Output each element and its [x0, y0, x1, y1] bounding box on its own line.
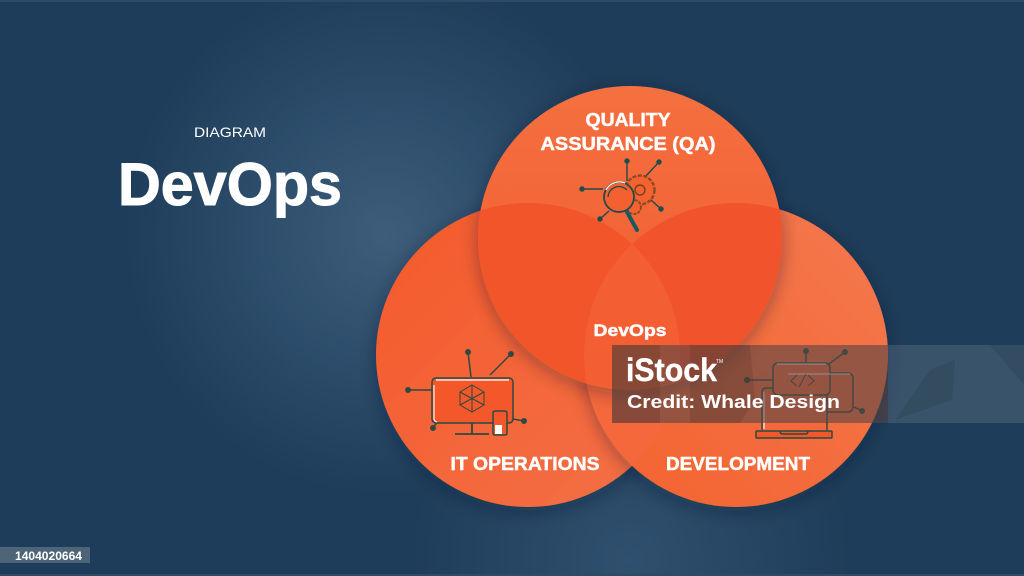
overlap: top and right [632, 203, 782, 345]
heading: quality assurance [540, 110, 716, 154]
circle: development [584, 203, 888, 507]
icon: monitor and phone [406, 350, 526, 435]
venn diagram [376, 86, 888, 507]
label: development: DEVELOPMENT [666, 454, 810, 474]
watermark: credit: Credit: Whale Design [627, 391, 840, 412]
watermark band [612, 345, 1024, 423]
circle: quality assurance [478, 86, 782, 390]
label: DIAGRAM: DIAGRAM [194, 124, 266, 140]
icon: laptop and code windows [745, 349, 864, 438]
image id badge: 1404020664 [15, 551, 83, 563]
overlap: center [584, 244, 680, 388]
heading: quality assurance: QUALITY [586, 110, 670, 130]
watermark: iStock: iStock [626, 352, 717, 388]
overlap: top and left [478, 203, 632, 384]
title: DevOps: DevOps [118, 151, 342, 218]
circle: IT operations [376, 203, 680, 507]
label: center DevOps: DevOps [594, 321, 666, 340]
overlap: left and right [606, 433, 635, 465]
label: IT operations: IT OPERATIONS [450, 454, 600, 474]
icon: magnifier and gears [580, 159, 663, 230]
image id badge [0, 547, 90, 563]
watermark: trademark: TM [716, 359, 723, 365]
heading: quality assurance: ASSURANCE (QA) [540, 134, 716, 154]
